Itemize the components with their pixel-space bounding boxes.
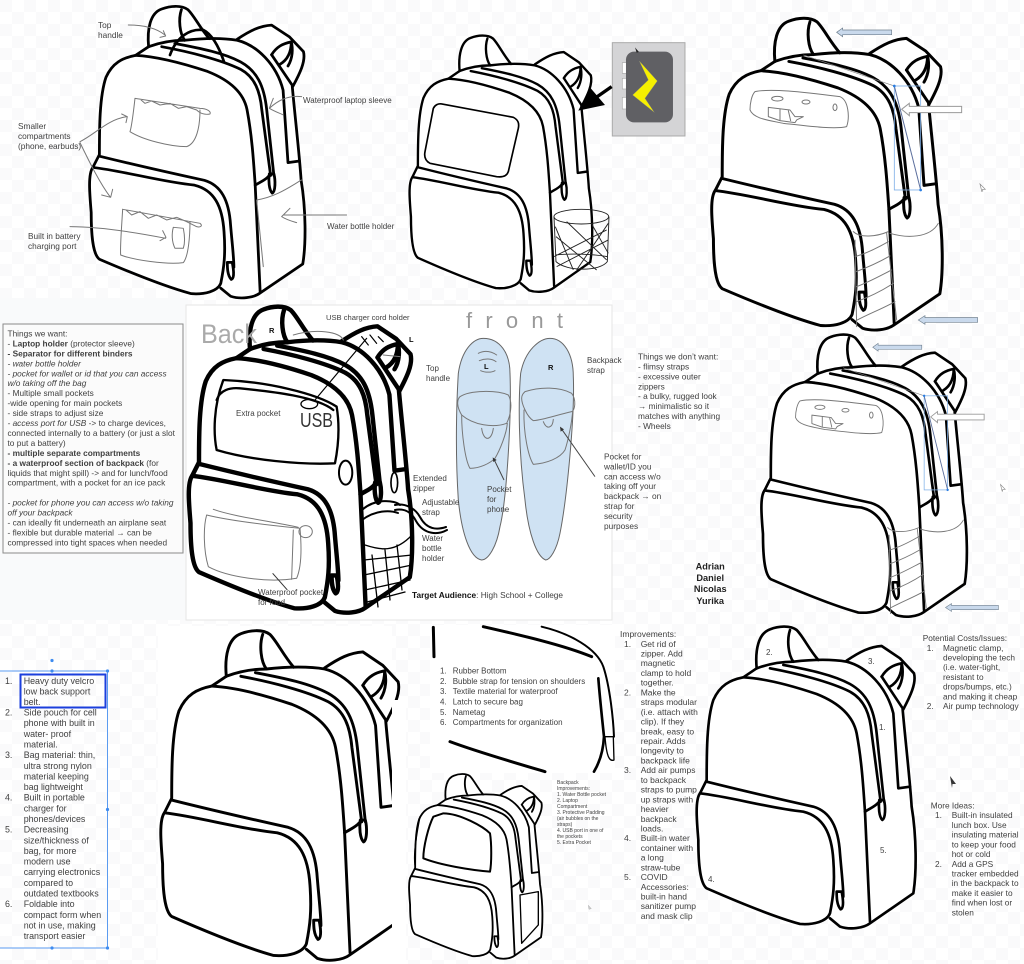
- text: improvements list: to backpack: [641, 775, 687, 785]
- wants list: off your backpack: [8, 508, 73, 518]
- strap letters and labels: USB charger cord holder: [326, 313, 410, 322]
- text: improvements list: 3.: [624, 765, 631, 775]
- strap letters and labels: zipper: [413, 484, 435, 493]
- list items: bag, for more: [24, 846, 77, 856]
- text: improvements list: (i.e. attach with: [641, 707, 698, 717]
- panel: backpack with arrows top right: [712, 18, 985, 330]
- improvements text: Compartment: [557, 804, 588, 810]
- list items: ultra strong nylon: [24, 761, 92, 771]
- list items: charger for: [24, 804, 67, 814]
- strap letters and labels: [236, 313, 623, 607]
- text: pocket for wallet: wallet/ID you: [603, 462, 652, 472]
- text: more ideas: in the backpack to: [952, 878, 1019, 888]
- text: improvements list: 4.: [624, 833, 631, 843]
- strap letters and labels: strap: [422, 508, 440, 517]
- cursor: [635, 47, 639, 53]
- text: improvements list: sanitizer pump: [641, 901, 696, 911]
- backpack drawing, back view: [189, 307, 412, 613]
- panel: zoomed backpack with numbered list: [0, 0, 615, 773]
- list numbers: 4.: [440, 698, 447, 706]
- list numbers: 5.: [5, 824, 12, 834]
- list items: water- proof: [23, 729, 72, 739]
- right strap drawing: [519, 338, 595, 560]
- text: more ideas: More Ideas:: [931, 800, 975, 810]
- text: improvements list: longevity to: [641, 746, 684, 756]
- list numbers: 1.: [440, 666, 447, 676]
- label: top handle: Top: [98, 20, 112, 30]
- list items: Built in portable: [24, 792, 85, 802]
- wants list: compressed into tight spaces when needed: [8, 537, 167, 547]
- label: smaller compartments: (phone, earbuds): [18, 141, 81, 151]
- zoomed backpack fragments: [433, 627, 614, 772]
- text: improvements list: clip). If they: [641, 717, 685, 727]
- target audience: Target Audience: High School + College: [412, 590, 563, 600]
- text: improvements list: COVID: [641, 872, 668, 882]
- text: things we don't want: - flimsy straps: [638, 362, 689, 372]
- strap letters and labels: for food: [258, 598, 285, 607]
- list items: Textile material for waterproof: [453, 687, 558, 696]
- text: potential costs and issues: and making it cheap: [943, 692, 1018, 702]
- text: more ideas: tracker embedded: [952, 868, 1019, 878]
- label: waterproof laptop sleeve: Waterproof laptop sleeve: [303, 96, 392, 105]
- list items: transport easier: [24, 931, 85, 941]
- list items: outdated textbooks: [24, 888, 99, 898]
- text: more ideas: make it easier to: [952, 888, 1013, 898]
- handwritten USB: USB: [300, 410, 333, 432]
- text: team names: Adrian: [696, 562, 725, 572]
- mesh bottle cup: [554, 209, 609, 270]
- wants list: w/o taking off the bag: [8, 378, 87, 388]
- text: improvements list: Accessories:: [641, 882, 689, 892]
- text: pocket for wallet: security: [604, 511, 633, 521]
- text: more ideas: 1.: [935, 810, 942, 820]
- strap letters and labels: for: [487, 495, 497, 504]
- panel: bottom left list: [0, 0, 109, 950]
- text: things we don't want: - a bulky, rugged look: [638, 391, 718, 401]
- list items: Foldable into: [24, 899, 75, 909]
- improvements text: 4. USB port in one of: [557, 828, 604, 834]
- text: improvements list: straps modular: [641, 697, 697, 707]
- text: things we don't want: - Wheels: [638, 421, 671, 431]
- wants list: - water bottle holder: [8, 358, 82, 368]
- wants list: - access port for USB -> to charge devices,: [8, 418, 166, 428]
- list numbers: 2.: [5, 708, 12, 718]
- waterproof pocket sketch: [204, 509, 301, 580]
- list numbers: 3.: [5, 750, 12, 760]
- list items: material keeping: [24, 772, 89, 782]
- improvements text: Improvements:: [557, 786, 590, 792]
- strap letters and labels: bottle: [422, 544, 442, 553]
- list items: compared to: [24, 878, 73, 888]
- text: improvements list: heavier: [641, 804, 669, 814]
- label: water bottle holder: Water bottle holder: [327, 222, 395, 231]
- charger diagram: [612, 43, 685, 136]
- strap letters and labels: Extended: [413, 474, 447, 483]
- strap letters and labels: Pocket: [487, 485, 512, 494]
- text: team names: Yurika: [696, 596, 725, 606]
- text: improvements list: magnetic: [641, 658, 676, 668]
- improvements text: Backpack: [557, 780, 579, 786]
- list numbers: 3.: [440, 687, 447, 696]
- text: more ideas: stolen: [952, 908, 974, 918]
- strap letters and labels: Adjustable: [422, 498, 460, 507]
- part numbers: 4.: [708, 875, 715, 884]
- part numbers: 2.: [766, 648, 773, 657]
- improvements text: 1. Water Bottle pocket: [557, 792, 607, 798]
- list items: carrying electronics: [24, 867, 101, 877]
- text: potential costs and issues: Magnetic clamp,: [943, 643, 1003, 653]
- wants list: - pocket for phone you can access w/o taking: [8, 498, 174, 508]
- USB port and cord: [301, 399, 318, 409]
- improvements text: 5. Extra Pocket: [557, 840, 592, 846]
- label: smaller compartments: Smaller: [18, 121, 46, 131]
- zipper pull ovals: [339, 461, 352, 485]
- label: battery charging port: charging port: [28, 241, 77, 251]
- wants list: Things we want:: [8, 328, 67, 338]
- list numbers: 6.: [5, 899, 12, 909]
- mesh bottle holder: [362, 501, 447, 607]
- text: things we don't want: - excessive outer: [638, 372, 701, 382]
- text: potential costs and issues: 2.: [927, 701, 934, 711]
- text: pocket for wallet: strap for: [604, 501, 635, 511]
- list items: Bubble strap for tension on shoulders: [453, 677, 585, 686]
- text: improvements list: straps to pump: [641, 785, 697, 795]
- sketches and annotation arrows: [70, 25, 347, 267]
- text: potential costs and issues: developing the tech: [943, 652, 1015, 662]
- text: potential costs and issues: resistant to: [943, 672, 984, 682]
- wants list: - side straps to adjust size: [8, 408, 104, 418]
- list items: bag lightweight: [24, 782, 83, 792]
- text: improvements list: break, easy to: [641, 726, 694, 736]
- black arrow: [578, 87, 612, 111]
- list items: size/thickness of: [24, 836, 89, 846]
- strap letters and labels: holder: [422, 554, 445, 563]
- text: pocket for wallet: taking off your: [604, 481, 656, 491]
- wants list: - a waterproof section of backpack (for: [8, 458, 159, 468]
- list numbers: 2.: [440, 677, 447, 686]
- wants list: - Multiple small pockets: [8, 388, 94, 398]
- list numbers: 1.: [5, 676, 12, 686]
- text: more ideas: Add a GPS: [952, 859, 994, 869]
- cursor icon: [950, 776, 956, 788]
- list items: not in use, making: [24, 920, 96, 930]
- cursor: [588, 905, 591, 909]
- panel: back and front backpack sketch: [186, 305, 623, 620]
- strap letters and labels: L: [484, 362, 489, 371]
- text: more ideas: hot or cold: [952, 849, 991, 859]
- strap letters and labels: Waterproof pocket: [258, 588, 324, 597]
- extra pocket outline: [215, 380, 338, 464]
- text: improvements list: and mask clip: [641, 911, 693, 921]
- text: improvements list: backpack life: [641, 755, 690, 765]
- strap letters and labels: R: [269, 326, 275, 335]
- strap letters and labels: Backpack: [587, 356, 623, 365]
- panel: small backpack with improvements: [0, 0, 607, 959]
- strap letters and labels: Top: [426, 364, 439, 373]
- handwritten heading: front: front: [466, 308, 563, 333]
- text: improvements list: together.: [641, 678, 674, 688]
- panel: annotated backpack top left: [5, 0, 401, 298]
- backpack drawing: [410, 36, 592, 292]
- backpack drawing: [697, 627, 916, 928]
- text: potential costs and issues: Air pump technology: [943, 701, 1019, 711]
- text: more ideas: Built-in insulated: [952, 810, 1013, 820]
- list items: Nametag: [453, 708, 485, 717]
- text: potential costs and issues: Potential Costs/Issues:: [923, 633, 1007, 643]
- text: more ideas: lunch box. Use: [952, 820, 1007, 830]
- text: things we don't want: → minimalistic so it: [638, 401, 710, 411]
- text: things we don't want: matches with anything: [638, 411, 720, 421]
- text: pocket for wallet: purposes: [604, 521, 638, 531]
- panel: backpack with charger and bottle cup: [410, 36, 685, 292]
- text: improvements list: backpack: [641, 814, 677, 824]
- list items: Bag material: thin,: [24, 750, 95, 760]
- backpack drawing: [409, 774, 542, 959]
- text: pocket for wallet: can access w/o: [604, 471, 661, 481]
- label: top handle: handle: [98, 30, 123, 40]
- text: improvements list: repair. Adds: [641, 736, 686, 746]
- list items: phone with built in: [24, 718, 95, 728]
- wants list: connected internally to a battery (or just a slot: [8, 428, 176, 438]
- improvements text: straps): [557, 822, 573, 828]
- text: improvements list: Improvements:: [620, 629, 676, 639]
- text: pocket for wallet: backpack → on: [604, 491, 662, 501]
- list items: phones/devices: [24, 814, 86, 824]
- left strap drawing: [456, 338, 511, 560]
- part numbers: 3.: [868, 657, 875, 666]
- text: improvements list: up straps with: [641, 794, 693, 804]
- text: improvements list: straw-tube: [641, 862, 681, 872]
- label: smaller compartments: compartments: [18, 131, 71, 141]
- text: improvements list: built-in hand: [641, 892, 687, 902]
- panel: plain backpack bottom left: [158, 626, 406, 964]
- strap letters and labels: L: [409, 335, 414, 344]
- text: improvements list: Add air pumps: [641, 765, 696, 775]
- list items: Decreasing: [24, 824, 69, 834]
- text: team names: Daniel: [696, 573, 724, 583]
- list items: Side pouch for cell: [24, 708, 97, 718]
- wants list: - multiple separate compartments: [8, 448, 141, 458]
- text: potential costs and issues: drops/bumps, etc.): [943, 682, 1012, 692]
- label: battery charging port: Built in battery: [28, 231, 81, 241]
- text: more ideas: find when lost or: [952, 898, 1012, 908]
- strap letters and labels: handle: [426, 374, 451, 383]
- text: improvements list: container with: [641, 843, 693, 853]
- improvements text: (air bubbles on the: [557, 816, 599, 822]
- text: more ideas: 2.: [935, 859, 942, 869]
- strap letters and labels: R: [548, 363, 554, 372]
- wants list: compartment, with a pocket for an ice pack: [8, 478, 166, 488]
- strap letters and labels: phone: [487, 505, 510, 514]
- panel: backpack with arrows middle right: [761, 335, 1005, 617]
- pockets: [423, 813, 491, 872]
- list items: Compartments for organization: [453, 718, 563, 727]
- part numbers: 1.: [879, 723, 886, 732]
- list items: modern use: [24, 856, 71, 866]
- text: potential costs and issues: 1.: [927, 643, 934, 653]
- text: things we don't want: zippers: [638, 381, 665, 391]
- text: improvements list: Make the: [641, 687, 676, 697]
- text: things we don't want: Things we don’t want:: [638, 352, 718, 362]
- text: potential costs and issues: (i.e. water-tight,: [943, 662, 1000, 672]
- list items: Heavy duty velcro: [24, 676, 94, 686]
- list items: low back support: [24, 686, 91, 696]
- part numbers: 5.: [880, 846, 887, 855]
- wants list: -wide opening for main pockets: [8, 398, 122, 408]
- text: more ideas: insulating material: [952, 830, 1019, 840]
- text: improvements list: Built-in water: [641, 833, 690, 843]
- text: pocket for wallet: Pocket for: [604, 452, 642, 462]
- strap letters and labels: strap: [587, 366, 605, 375]
- wants list: - can ideally fit underneath an airplane seat: [8, 518, 167, 528]
- improvements text: the pockets: [557, 834, 583, 840]
- improvements text: 3. Protective Padding: [557, 810, 605, 816]
- improvements text: 2. Laptop: [557, 798, 578, 804]
- strap letters and labels: Water: [422, 534, 443, 543]
- wants list: - pocket for wallet or id that you can access: [8, 368, 167, 378]
- wants list: - flexible but durable material → can be: [8, 528, 152, 538]
- text: improvements list: Get rid of: [641, 639, 676, 649]
- list items: compact form when: [24, 910, 101, 920]
- wants list: liquids that might spill) -> and for lunch/food: [8, 468, 168, 478]
- strap letters and labels: Extra pocket: [236, 409, 281, 418]
- list numbers: 5.: [440, 708, 447, 717]
- front laptop pocket: [425, 104, 519, 177]
- backpack drawing: [90, 6, 305, 298]
- text: improvements list: loads.: [641, 824, 663, 834]
- list items: material.: [24, 740, 58, 750]
- handwritten heading: back: Back: [201, 319, 257, 349]
- selection frame: [0, 659, 109, 950]
- wants list: -: [8, 338, 13, 348]
- text: team names: Nicolas: [694, 584, 727, 594]
- list items: Rubber Bottom: [453, 666, 507, 676]
- wants list: Laptop holder (protector sleeve): [13, 338, 135, 348]
- list numbers: 6.: [440, 718, 447, 727]
- wants list: - Separator for different binders: [8, 348, 133, 358]
- text: improvements list: a long: [641, 853, 664, 863]
- text: improvements list: 1.: [624, 639, 631, 649]
- panel: things we want: [0, 0, 188, 620]
- list items: Latch to secure bag: [453, 698, 523, 706]
- text: more ideas: to keep your food: [952, 839, 1016, 849]
- text: improvements list: zipper. Add: [641, 648, 683, 658]
- list items: belt.: [24, 697, 40, 707]
- text: improvements list: clamp to hold: [641, 668, 692, 678]
- text: improvements list: 5.: [624, 872, 631, 882]
- text: improvements list: 2.: [624, 687, 631, 697]
- wants list: to put a battery): [8, 438, 66, 448]
- list numbers: 4.: [5, 792, 12, 802]
